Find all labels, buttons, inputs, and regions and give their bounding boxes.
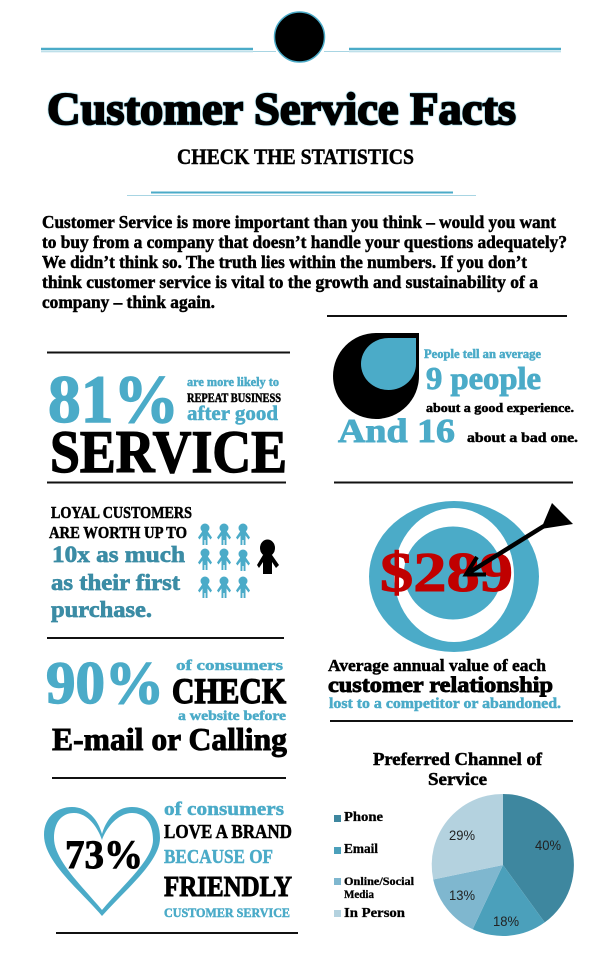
intro paragraph	[42, 212, 567, 312]
text: people tell an average: People tell an average	[424, 347, 541, 361]
text: customer service: CUSTOMER SERVICE	[164, 905, 290, 920]
stat: 73%: 73%	[65, 832, 143, 877]
pie chart	[432, 794, 574, 936]
text: as their first: as their first	[51, 570, 180, 595]
panel: 73% love a brand	[44, 799, 292, 920]
chart title: Preferred Channel of	[373, 749, 542, 769]
subtitle divider	[127, 192, 476, 196]
intro paragraph: company – think again.	[42, 292, 215, 312]
stat: 90%: 90%	[46, 650, 164, 716]
text: e-mail or calling: E-mail or Calling	[52, 721, 287, 757]
chart legend: Phone	[344, 809, 383, 824]
pie chart: 40%	[535, 837, 561, 853]
text: about a good experience: about a good experience.	[426, 400, 574, 415]
text: 10x as much: 10x as much	[52, 542, 185, 567]
panel: 81% repeat business	[48, 361, 287, 485]
chart title: Service	[428, 769, 487, 789]
pie chart: 18%	[493, 913, 519, 929]
stat: $289: $289	[380, 542, 513, 604]
chart legend: Email	[344, 841, 378, 856]
chart title	[373, 749, 542, 789]
title: Customer Service Facts	[47, 84, 516, 134]
icon: black customer	[257, 540, 279, 574]
icon: blue customers	[198, 524, 250, 598]
text: purchase: purchase.	[51, 597, 152, 622]
text: because of: BECAUSE OF	[164, 846, 273, 868]
intro paragraph: to buy from a company that doesn’t handle your questions adequately?	[42, 232, 567, 252]
text: a website before: a website before	[178, 709, 286, 724]
text: of consumers: of consumers	[164, 799, 284, 820]
text: check: CHECK	[172, 671, 286, 711]
intro paragraph: Customer Service is more important than you think – would you want	[42, 212, 556, 232]
panel: preferred channel chart	[334, 749, 574, 936]
pie chart: 29%	[449, 827, 475, 843]
text: about a bad one: about a bad one.	[467, 431, 578, 446]
chart legend	[334, 809, 414, 920]
text: loyal customers: LOYAL CUSTOMERS	[51, 503, 192, 522]
text: after good: after good	[187, 401, 278, 425]
text: average annual value: Average annual value of each	[328, 656, 547, 675]
text: 9 people: 9 people	[426, 360, 541, 396]
subtitle: CHECK THE STATISTICS	[177, 144, 414, 169]
intro paragraph: We didn’t think so. The truth lies within the numbers. If you don’t	[42, 252, 527, 272]
text: are more likely to: are more likely to	[187, 375, 279, 389]
text: lost to a competitor: lost to a competitor or abandoned.	[329, 696, 561, 712]
text: friendly: FRIENDLY	[164, 872, 292, 903]
icon: target	[369, 501, 539, 652]
text: and 16: And 16	[338, 413, 455, 450]
panel: word of mouth	[333, 333, 578, 450]
panel: 90% check	[46, 650, 287, 757]
text: are worth up to: ARE WORTH UP TO	[49, 523, 187, 542]
panel: $289 target	[328, 501, 573, 712]
header ornament	[41, 12, 561, 62]
text: of consumers: of consumers	[176, 658, 283, 674]
text: customer relationship: customer relationship	[328, 672, 553, 697]
stat: 81%: 81%	[48, 361, 179, 437]
panel: loyal customers	[49, 503, 279, 622]
chart legend: Online/Social	[344, 876, 414, 888]
icon: arrow	[466, 503, 573, 574]
icon: speech drop	[333, 333, 419, 419]
chart legend: Media	[344, 889, 374, 901]
chart legend: In Person	[344, 905, 406, 920]
icon: heart	[44, 807, 160, 916]
text: repeat business: REPEAT BUSINESS	[187, 391, 281, 405]
pie chart: 13%	[449, 887, 475, 903]
text: service: SERVICE	[50, 419, 287, 485]
text: love a brand: LOVE A BRAND	[164, 821, 292, 843]
intro paragraph: think customer service is vital to the growth and sustainability of a	[42, 272, 538, 292]
